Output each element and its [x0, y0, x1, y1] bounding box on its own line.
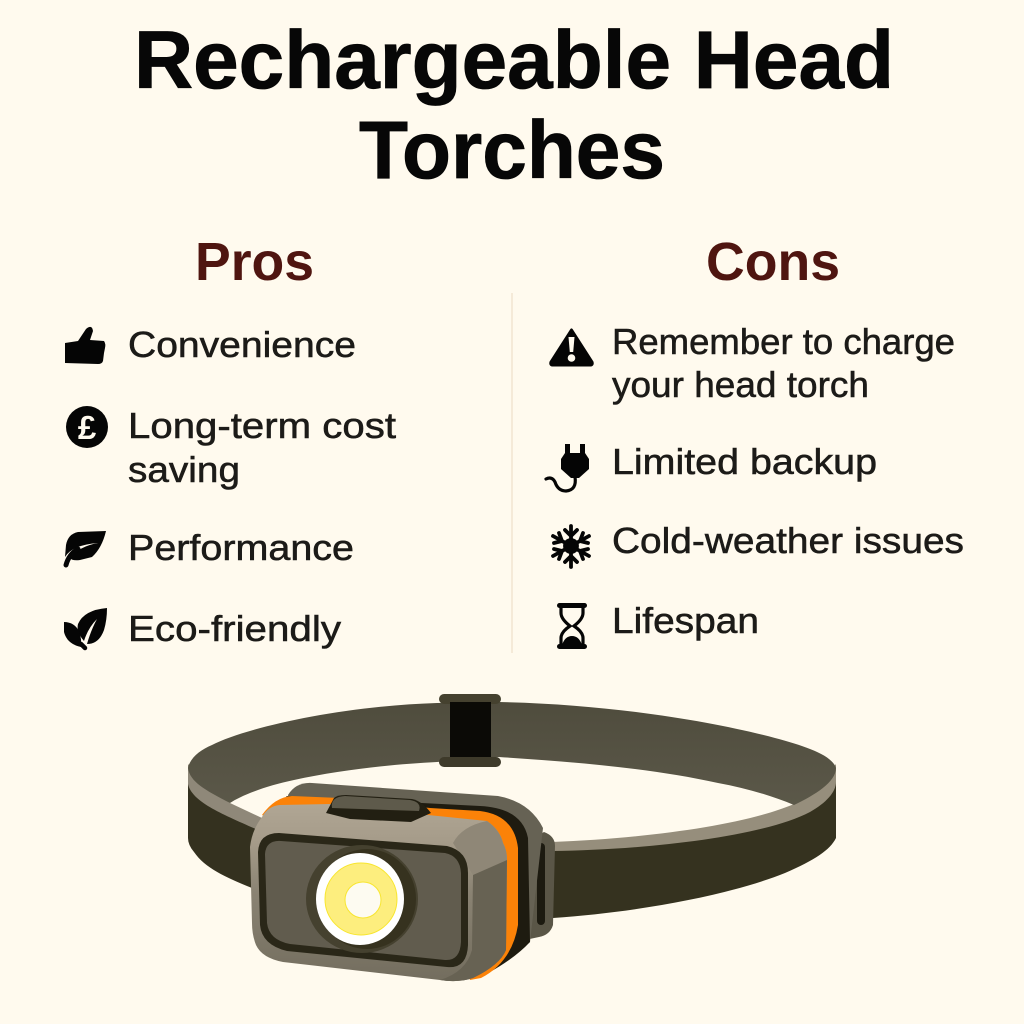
icon: snowflake [553, 526, 589, 567]
title: Rechargeable Head [134, 15, 894, 106]
icon: thumbs up [65, 327, 105, 364]
panel: cons [546, 232, 964, 649]
strap front left [188, 780, 262, 888]
strap front right [548, 780, 836, 918]
title [134, 15, 894, 196]
text: long-term cost saving [128, 405, 396, 490]
text: lifespan: Lifespan [612, 600, 759, 641]
icon: pound coin: £ [78, 409, 97, 446]
recessed front panel [258, 833, 468, 967]
head strap [188, 694, 836, 918]
lens [306, 845, 418, 953]
illustration: head torch [188, 694, 836, 981]
text: long-term cost saving: saving [128, 449, 240, 490]
text: remember to charge: your head torch [612, 364, 869, 405]
icon: pound coin [66, 406, 108, 448]
torch rear housing [288, 783, 543, 978]
front shell [250, 804, 507, 981]
strap bracket [525, 832, 555, 940]
orange band [262, 796, 518, 980]
text: limited backup: Limited backup [612, 441, 877, 482]
icon: warning triangle [551, 330, 592, 365]
strap light rim right [552, 764, 836, 851]
text: performance: Performance [128, 527, 354, 568]
icon: leaf [65, 531, 106, 565]
text: cold-weather issues: Cold-weather issues [612, 520, 964, 561]
strap back inner surface [188, 702, 836, 805]
text: remember to charge: Remember to charge [612, 321, 955, 362]
text: eco-friendly: Eco-friendly [128, 608, 341, 649]
heading: cons: Cons [706, 232, 840, 292]
top button [326, 795, 431, 822]
icon: hourglass [557, 603, 587, 649]
text: convenience: Convenience [128, 324, 356, 365]
title: Torches [359, 105, 665, 196]
panel: pros [64, 232, 396, 649]
side facet [453, 821, 507, 875]
strap light rim left [188, 764, 262, 830]
icon: plug [546, 444, 589, 491]
heading: pros: Pros [195, 232, 314, 292]
text: remember to charge [612, 321, 955, 405]
strap clip [439, 694, 501, 767]
icon: sprout [64, 608, 107, 648]
text: long-term cost saving: Long-term cost [128, 405, 396, 446]
black rear band [286, 796, 530, 972]
